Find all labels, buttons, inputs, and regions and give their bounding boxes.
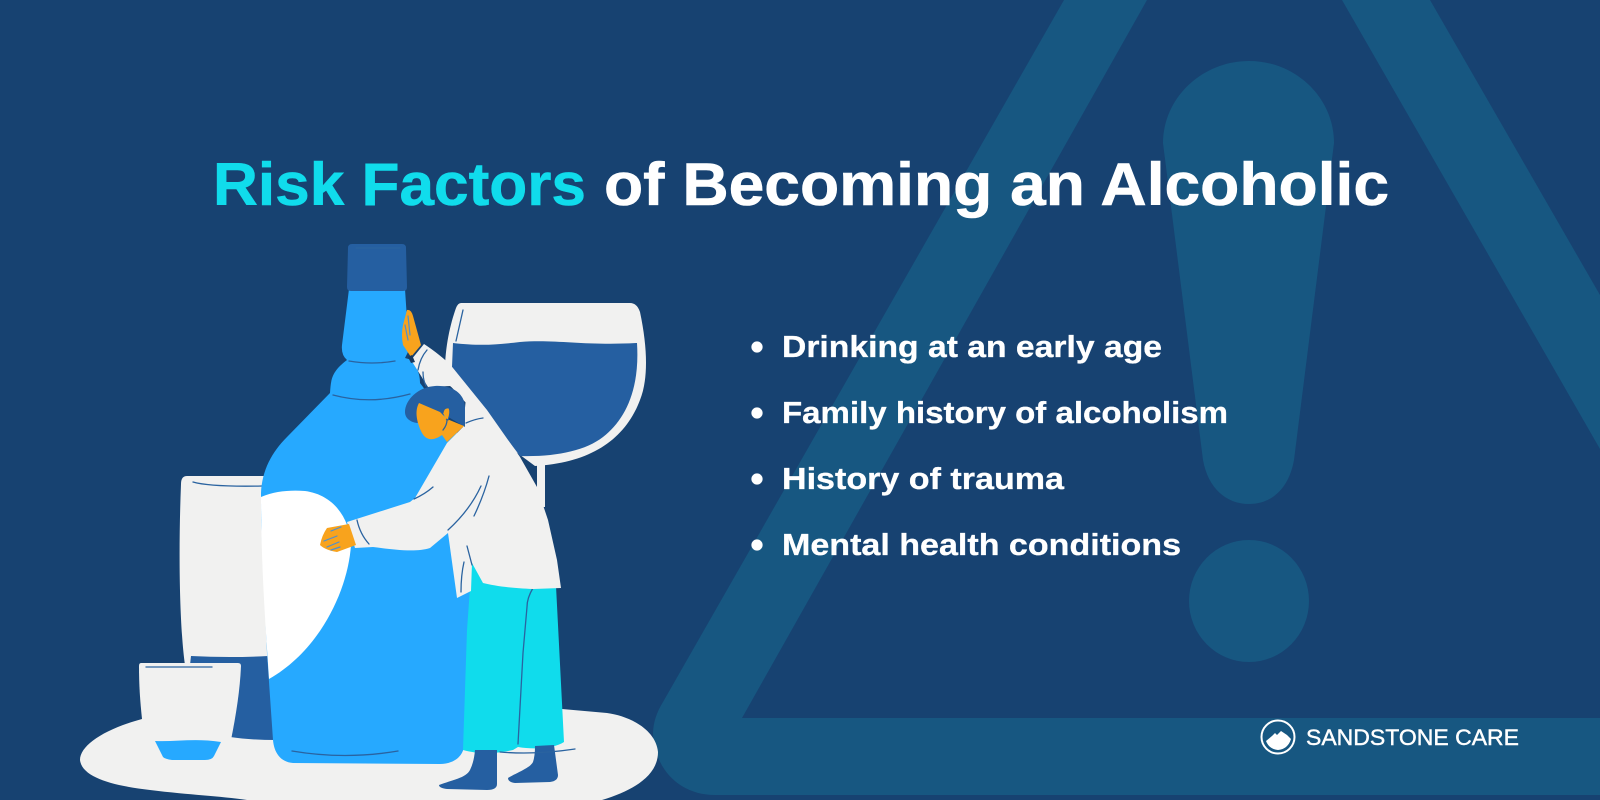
risk factor bullet list: Family history of alcoholism [782,395,1228,430]
coat [347,344,561,598]
title: Risk Factors [213,151,586,218]
risk factor bullet list: Drinking at an early age [782,329,1162,364]
feet [439,745,558,790]
Sandstone Care logo [1262,720,1519,754]
logo icon [1262,720,1294,754]
face and neck [417,403,464,442]
bottle cap [347,244,407,291]
illustration: person hugging a bottle [80,244,658,800]
front cup with drink [139,663,241,760]
lower hand [320,524,356,552]
wine glass [445,303,646,507]
hair [405,386,465,427]
bottle label [261,491,351,679]
title [213,151,1389,218]
trousers [463,560,564,753]
background warning triangle watermark [653,0,1600,795]
floor blob [80,700,658,800]
risk factor bullet list [752,329,1228,562]
raised hand [402,310,421,363]
risk factor bullet list: Mental health conditions [782,527,1181,562]
risk factor bullet list: History of trauma [782,461,1065,496]
logo wordmark: SANDSTONE CARE [1306,725,1519,750]
bottle [261,244,471,764]
floor shadow line [500,749,575,753]
title: of Becoming an Alcoholic [604,151,1389,218]
rear tumbler glass [180,476,276,740]
